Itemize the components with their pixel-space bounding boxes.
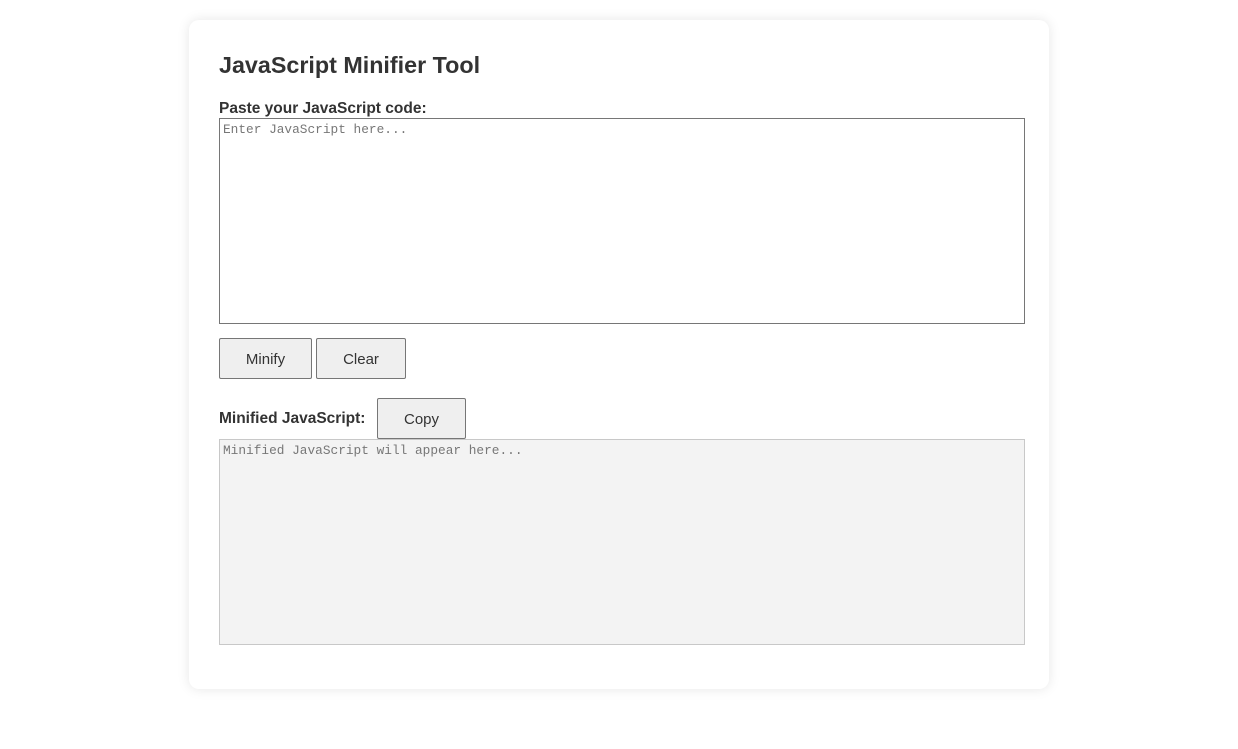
output textarea — [219, 439, 1025, 645]
input textarea — [219, 118, 1025, 324]
button: copy: Copy — [404, 411, 439, 428]
output textarea: Minified JavaScript will appear here... — [223, 443, 522, 458]
button: clear: Clear — [343, 351, 379, 368]
input textarea: Enter JavaScript here... — [223, 122, 407, 137]
title: JavaScript Minifier Tool — [219, 52, 480, 78]
button: copy — [377, 398, 466, 439]
button: minify — [219, 338, 312, 379]
input label: Paste your JavaScript code: — [219, 100, 427, 117]
button: clear — [316, 338, 406, 379]
panel: minifier card — [189, 20, 1049, 689]
button: minify: Minify — [246, 351, 285, 368]
output label: Minified JavaScript: — [219, 410, 365, 427]
